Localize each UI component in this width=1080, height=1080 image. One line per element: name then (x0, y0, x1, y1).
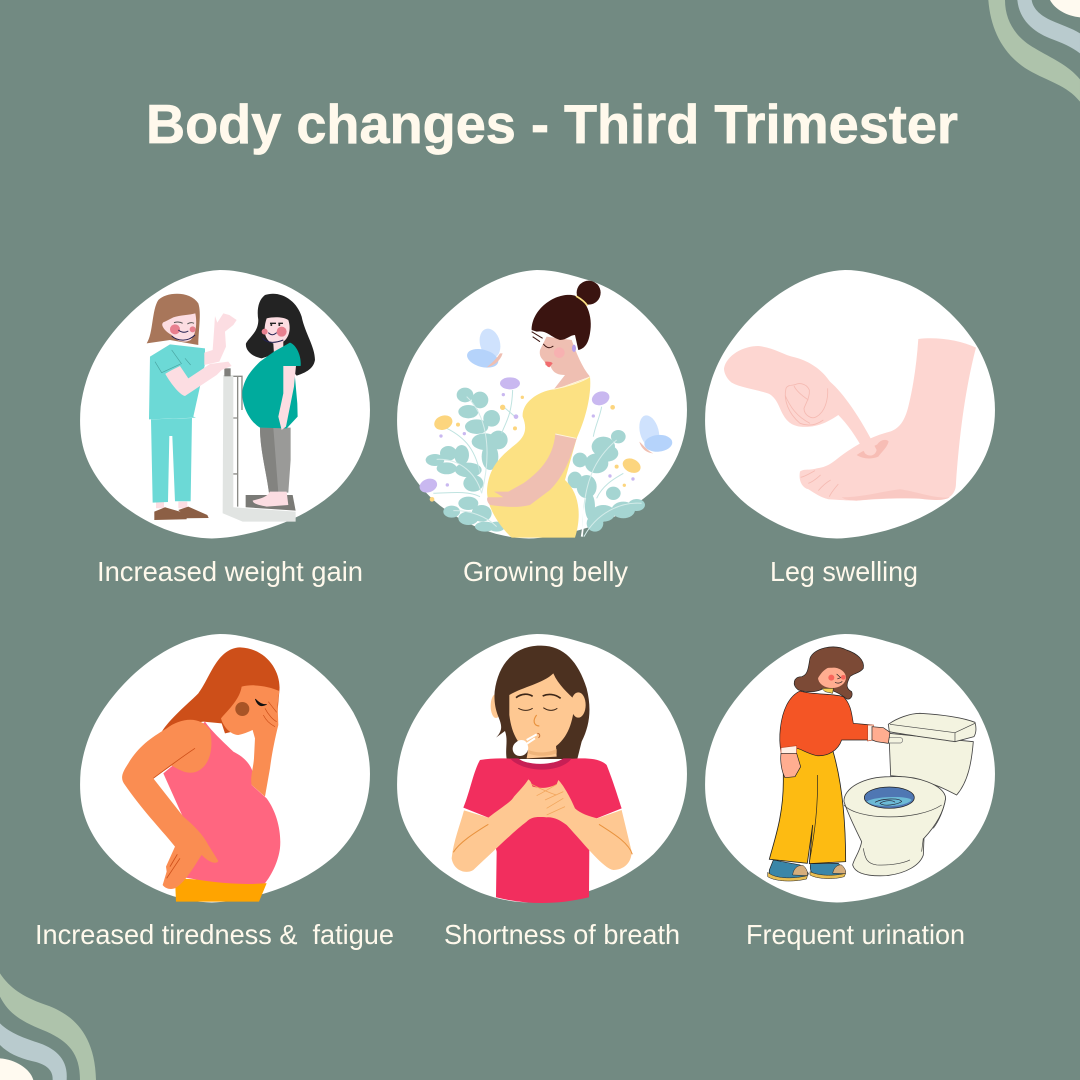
white blob 4 (80, 634, 370, 902)
panel: frequent urination (705, 634, 995, 950)
white blob 5 (397, 634, 687, 902)
label: leg swelling: Leg swelling (770, 556, 918, 587)
label: growing belly: Growing belly (463, 556, 628, 587)
illustration: pregnant woman with flowers and butterflies (418, 281, 673, 538)
illustration: woman short of breath with hands on chest (452, 646, 632, 903)
panel: increased weight gain (80, 270, 370, 587)
label: frequent urination: Frequent urination (746, 919, 965, 950)
corner decoration: bottom left waves (0, 973, 96, 1080)
illustration: woman flushing toilet (768, 647, 976, 881)
white blob 3 (705, 270, 995, 538)
label: shortness of breath: Shortness of breath (444, 919, 680, 950)
white blob 2 (397, 270, 687, 538)
illustration: tired pregnant woman holding forehead (122, 647, 280, 902)
panel: leg swelling (705, 270, 995, 587)
panel: shortness of breath (397, 634, 687, 950)
corner decoration: top right waves (988, 0, 1080, 102)
panel: growing belly (397, 270, 687, 587)
illustration: finger pressing swollen foot (724, 338, 976, 501)
panel: increased tiredness and fatigue (35, 634, 394, 950)
label: increased weight gain: Increased weight gain (97, 556, 363, 587)
illustration: nurse weighing pregnant woman on scale (147, 294, 315, 522)
title: Body changes - Third Trimester (146, 93, 958, 155)
white blob 1 (80, 270, 370, 538)
label: increased tiredness and fatigue: Increased tiredness & fatigue (35, 919, 394, 950)
white blob 6 (705, 634, 995, 902)
